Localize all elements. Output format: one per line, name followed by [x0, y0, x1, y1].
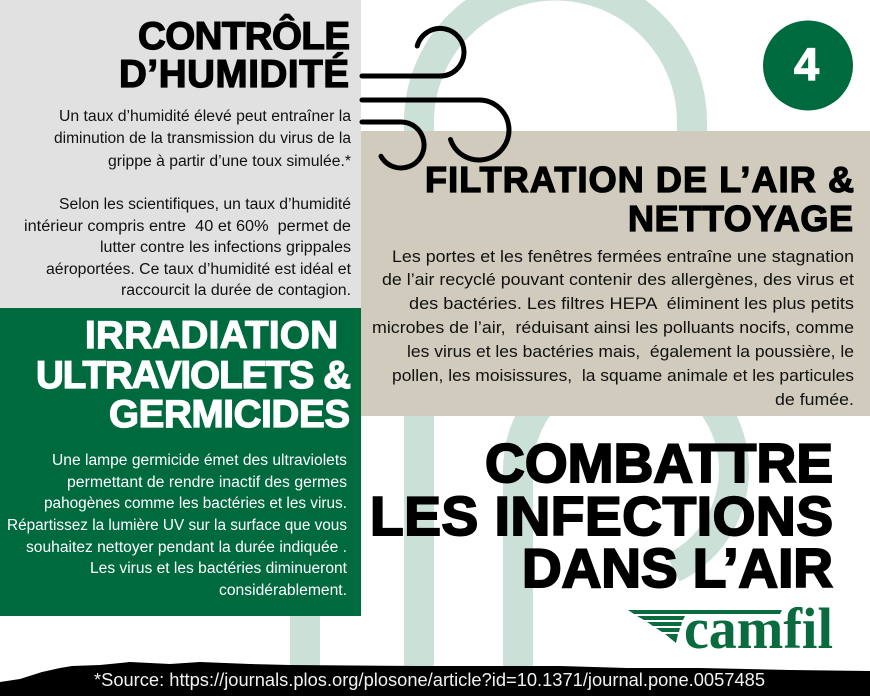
background: pale green arches: [305, 0, 734, 670]
text: irradiation body: Les virus et les bactéries diminueront: [90, 560, 348, 577]
heading: humidity control: [119, 13, 350, 96]
heading: humidity control: CONTRÔLE: [138, 13, 350, 58]
heading: air filtration and cleaning: NETTOYAGE: [628, 198, 853, 239]
text: humidity body: aéroportées. Ce taux d’humidité est idéal et: [46, 261, 352, 278]
text: filtration body: pollen, les moisissures, la squame animale et les particules: [392, 367, 854, 385]
heading: humidity control: D’HUMIDITÉ: [119, 52, 349, 96]
text: irradiation body: souhaitez nettoyer pendant la durée indiquée .: [26, 539, 347, 556]
title: [370, 432, 833, 599]
heading: germicidal ultraviolet irradiation: GERMICIDES: [109, 393, 350, 436]
badge: number 4: 4: [794, 39, 819, 90]
text: humidity body: intérieur compris entre 40 et 60% permet de: [24, 218, 351, 235]
text: filtration body: les virus et les bactéries mais, également la poussière, le: [407, 343, 854, 361]
text: humidity body: [24, 108, 352, 299]
text: filtration body: des bactéries. Les filtres HEPA éliminent les plus petits: [409, 295, 854, 313]
text: humidity body: Selon les scientifiques, un taux d’humidité: [59, 196, 351, 213]
text: irradiation body: Une lampe germicide émet des ultraviolets: [52, 452, 347, 469]
text: humidity body: grippe à partir d’une toux simulée.*: [108, 153, 351, 170]
icon: wind lines: [362, 28, 509, 168]
heading: air filtration and cleaning: [425, 159, 854, 239]
text: filtration body: Les portes et les fenêtres fermées entraîne une stagnation: [392, 248, 854, 266]
text: irradiation body: [7, 452, 348, 599]
heading: germicidal ultraviolet irradiation: ULTRAVIOLETS &: [36, 354, 351, 397]
text: filtration body: microbes de l’air, réduisant ainsi les polluants nocifs, comme: [372, 319, 854, 337]
title: LES INFECTIONS: [370, 485, 833, 547]
title: DANS L’AIR: [522, 537, 833, 599]
text: filtration body: de fumée.: [775, 391, 854, 409]
panel: humidity control: [0, 0, 361, 308]
panel: air filtration and cleaning: [361, 131, 870, 416]
text: filtration body: [372, 248, 854, 409]
text: irradiation body: permettant de rendre inactif des germes: [67, 474, 347, 491]
logo: camfil: camfil: [684, 596, 833, 661]
heading: germicidal ultraviolet irradiation: [36, 314, 351, 436]
text: irradiation body: considérablement.: [219, 582, 347, 599]
text: humidity body: lutter contre les infections grippales: [100, 239, 351, 256]
heading: air filtration and cleaning: FILTRATION DE L’AIR &: [425, 159, 854, 200]
heading: germicidal ultraviolet irradiation: IRRADIATION: [85, 314, 338, 357]
text: humidity body: diminution de la transmission du virus de la: [54, 130, 351, 147]
title: COMBATTRE: [485, 432, 833, 494]
text: filtration body: de l’air recyclé pouvant contenir des allergènes, des virus et: [382, 271, 854, 289]
text: humidity body: raccourcit la durée de contagion.: [121, 282, 351, 299]
footer: source band: [0, 662, 870, 696]
text: irradiation body: pahogènes comme les bactéries et les virus.: [44, 495, 347, 512]
text: irradiation body: Répartissez la lumière UV sur la surface que vous: [7, 517, 347, 534]
text: humidity body: Un taux d’humidité élevé peut entraîner la: [59, 108, 351, 125]
text: source citation: *Source: https://journals.plos.org/plosone/article?id=10.1371/journal.pone.0057485: [94, 670, 765, 690]
badge: number 4: [763, 20, 853, 110]
panel: germicidal ultraviolet irradiation: [0, 308, 361, 616]
